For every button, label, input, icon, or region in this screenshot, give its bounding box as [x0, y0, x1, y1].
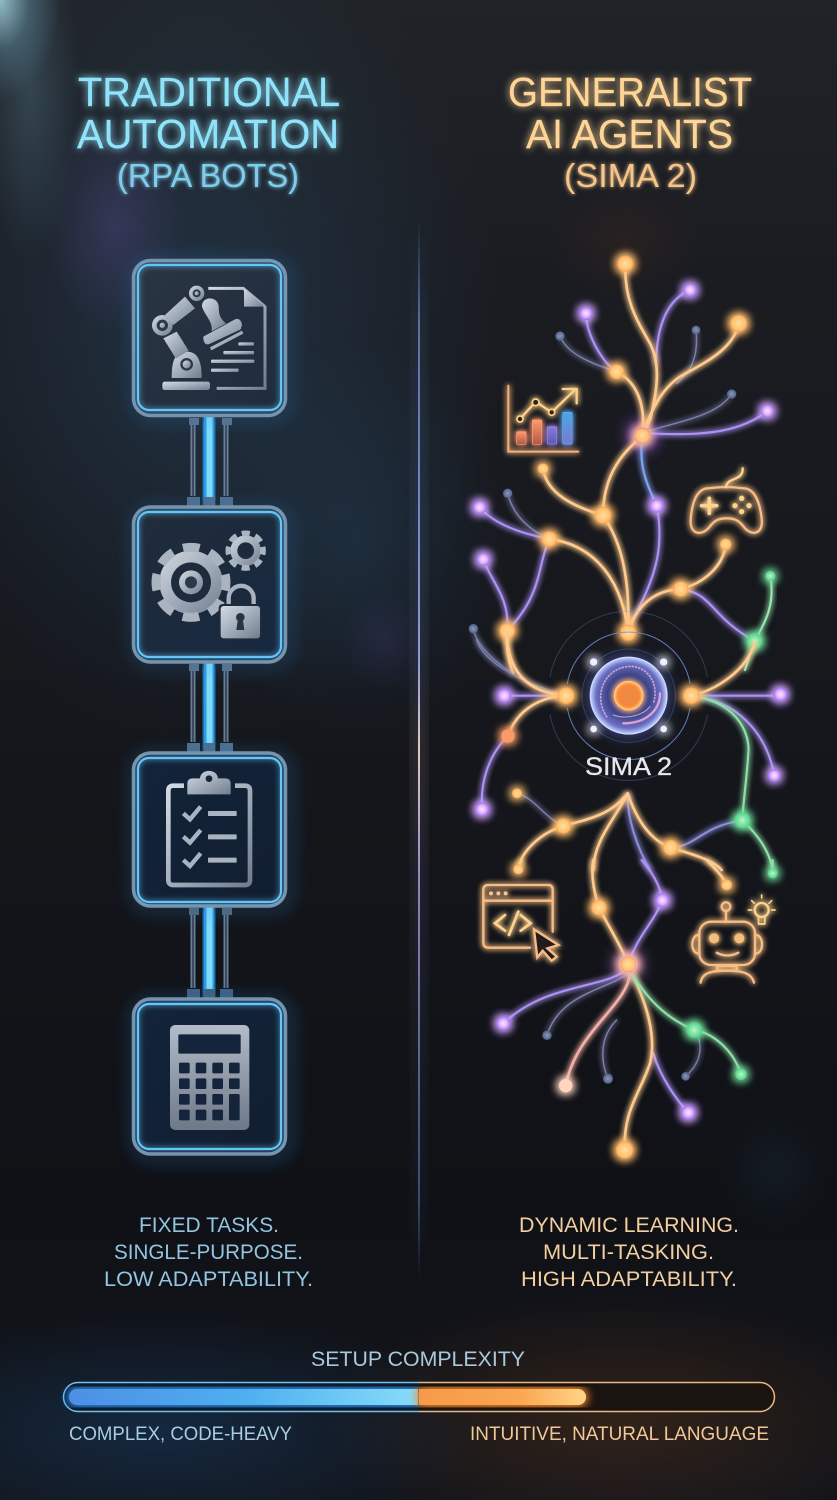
icon: robot with light bulb — [692, 895, 775, 983]
left heading: traditional automation: (RPA BOTS) — [117, 157, 299, 194]
icon: gears and lock — [156, 533, 263, 640]
text block: traditional traits — [104, 1213, 313, 1291]
text block: generalist traits: MULTI-TASKING. — [543, 1240, 714, 1264]
icon: growth chart — [508, 386, 578, 452]
icon: clipboard — [168, 771, 250, 885]
lower branches and nodes — [483, 860, 778, 1159]
left heading: traditional automation: AUTOMATION — [77, 111, 339, 157]
icon: robot arm and document — [152, 286, 265, 390]
SIMA orb sphere — [587, 654, 670, 737]
label: intuitive: INTUITIVE, NATURAL LANGUAGE — [470, 1423, 769, 1445]
panel: calculator — [134, 999, 290, 1158]
setup complexity scale — [63, 1348, 774, 1445]
label: SIMA 2: SIMA 2 — [585, 753, 672, 781]
text block: generalist traits: HIGH ADAPTABILITY. — [521, 1267, 737, 1291]
heading: setup complexity: SETUP COMPLEXITY — [311, 1348, 525, 1371]
central SIMA 2 orb and branches — [475, 611, 787, 870]
text block: generalist traits: DYNAMIC LEARNING. — [519, 1213, 739, 1237]
connector: robot to gears — [187, 417, 233, 506]
panel: traditional automation task chain — [134, 260, 290, 1158]
panel: robot arm stamping document — [134, 260, 290, 419]
left heading: traditional automation — [77, 69, 340, 194]
diagram: SIMA 2 neural network — [469, 256, 787, 1159]
connector: gears to checklist — [187, 663, 233, 752]
progress bar — [63, 1382, 774, 1412]
SIMA orb rings — [550, 611, 707, 780]
text block: traditional traits: LOW ADAPTABILITY. — [104, 1267, 313, 1291]
text block: traditional traits: FIXED TASKS. — [139, 1213, 279, 1237]
right heading: generalist AI agents — [508, 69, 752, 194]
right heading: generalist AI agents: GENERALIST — [508, 69, 752, 115]
label: complex: COMPLEX, CODE-HEAVY — [69, 1423, 292, 1445]
panel: gears and padlock — [134, 507, 290, 666]
upper branches and nodes — [469, 256, 775, 673]
icon: calculator — [170, 1025, 249, 1130]
right heading: generalist AI agents: (SIMA 2) — [564, 157, 697, 194]
icon: code window with cursor — [483, 885, 558, 961]
text block: traditional traits: SINGLE-PURPOSE. — [114, 1240, 303, 1264]
icon: game controller — [691, 468, 762, 533]
connector: checklist to calculator — [187, 907, 233, 998]
left heading: traditional automation: TRADITIONAL — [78, 69, 340, 115]
right heading: generalist AI agents: AI AGENTS — [526, 111, 733, 157]
central divider line — [414, 220, 424, 1280]
panel: clipboard checklist — [134, 753, 290, 910]
text block: generalist traits — [519, 1213, 739, 1291]
